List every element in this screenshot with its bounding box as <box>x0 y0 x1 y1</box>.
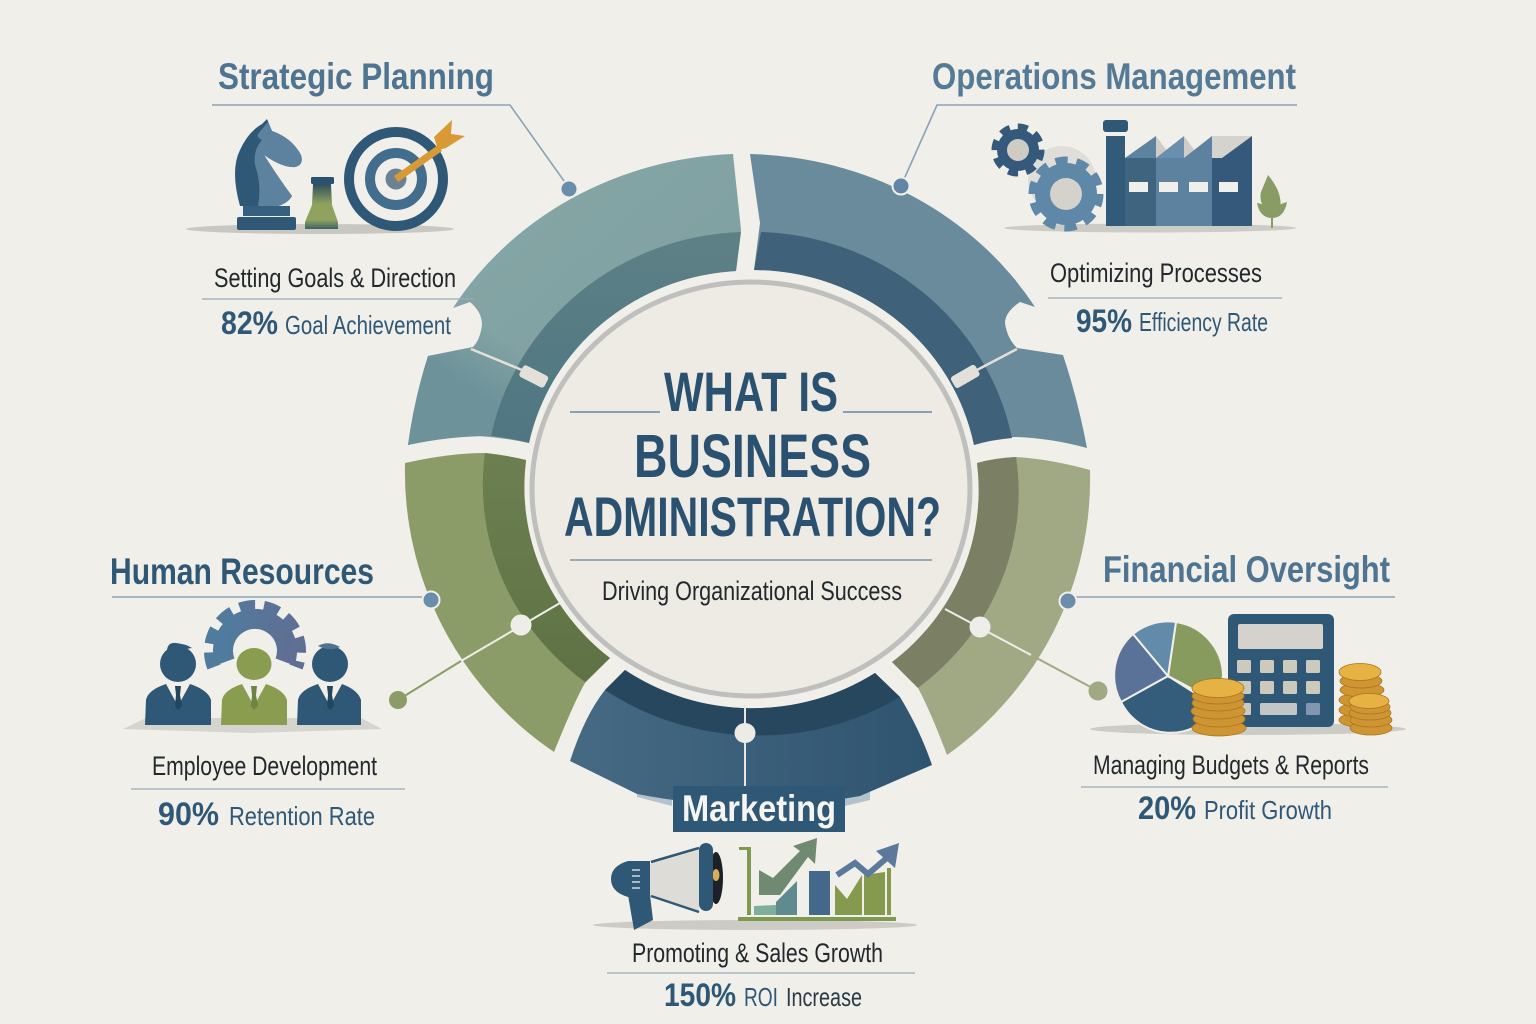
stat: Increase <box>786 982 862 1012</box>
icon: coin stacks <box>1191 664 1392 736</box>
panel: marketing <box>593 786 917 1013</box>
panel: central ring of segments <box>405 154 1090 806</box>
segment: financial oversight <box>892 457 1090 755</box>
icon: chess knight <box>235 119 302 230</box>
subtitle: Driving Organizational Success <box>602 576 902 606</box>
icon: gears <box>995 127 1099 227</box>
text: description: Managing Budgets & Reports <box>1093 750 1369 780</box>
icon: target with arrow <box>349 120 465 226</box>
connector: strategic planning clip <box>471 349 549 389</box>
panel: strategic planning <box>186 56 578 341</box>
text: description: Setting Goals & Direction <box>214 263 456 293</box>
stat: ROI <box>744 982 778 1012</box>
stat: 90% <box>158 796 219 832</box>
title: WHAT IS <box>664 360 838 423</box>
icon: team people <box>145 643 361 725</box>
title: BUSINESS <box>634 422 871 490</box>
icon: growth chart <box>738 838 899 921</box>
icon: shadow <box>186 224 454 234</box>
heading: Strategic Planning <box>218 56 494 97</box>
stat <box>664 977 862 1013</box>
segment: strategic planning <box>408 154 741 445</box>
stat: 82% <box>221 305 278 341</box>
text: description: Optimizing Processes <box>1050 258 1262 288</box>
heading: Financial Oversight <box>1103 549 1390 590</box>
leader line <box>892 105 1297 194</box>
segment: human resources <box>405 453 610 752</box>
title <box>564 360 941 548</box>
icon: leaf <box>1257 175 1287 228</box>
segment: marketing <box>570 670 932 806</box>
connector: human resources <box>389 603 560 709</box>
heading: Human Resources <box>110 551 374 592</box>
icon: pie chart <box>1114 621 1223 733</box>
text: description: Employee Development <box>152 751 377 781</box>
connector: financial oversight <box>945 609 1108 700</box>
stat: Retention Rate <box>229 801 375 831</box>
stat <box>1076 303 1268 339</box>
leader line <box>112 592 440 608</box>
text: description: Promoting & Sales Growth <box>632 938 883 968</box>
icon: factory <box>1103 120 1252 226</box>
stat <box>158 796 375 832</box>
panel: financial oversight <box>1060 549 1406 826</box>
stat: 95% <box>1076 303 1132 339</box>
heading: Operations Management <box>932 56 1296 97</box>
stat: Goal Achievement <box>285 310 452 340</box>
icon: shadow <box>1004 224 1296 232</box>
stat <box>1138 790 1332 826</box>
stat: 20% <box>1138 790 1196 826</box>
stat: 150% <box>664 977 736 1013</box>
stat <box>221 305 452 341</box>
icon: pawn <box>305 177 338 229</box>
stat: Profit Growth <box>1204 795 1332 825</box>
segment: operations management <box>750 154 1087 448</box>
leader line <box>212 105 578 198</box>
panel: human resources <box>110 551 440 832</box>
center circle <box>532 282 970 696</box>
connector: operations clip <box>950 349 1017 389</box>
leader line <box>1060 592 1395 610</box>
icon: shadow <box>1090 723 1406 735</box>
panel: operations management <box>892 56 1297 339</box>
stat: Efficiency Rate <box>1139 307 1268 337</box>
title: ADMINISTRATION? <box>564 485 941 548</box>
icon: megaphone <box>611 843 723 930</box>
icon: shadow <box>593 920 917 930</box>
heading label: Marketing <box>682 788 836 829</box>
icon: shadow <box>123 718 382 733</box>
icon: calculator <box>1228 614 1334 727</box>
icon: gear <box>211 607 299 667</box>
